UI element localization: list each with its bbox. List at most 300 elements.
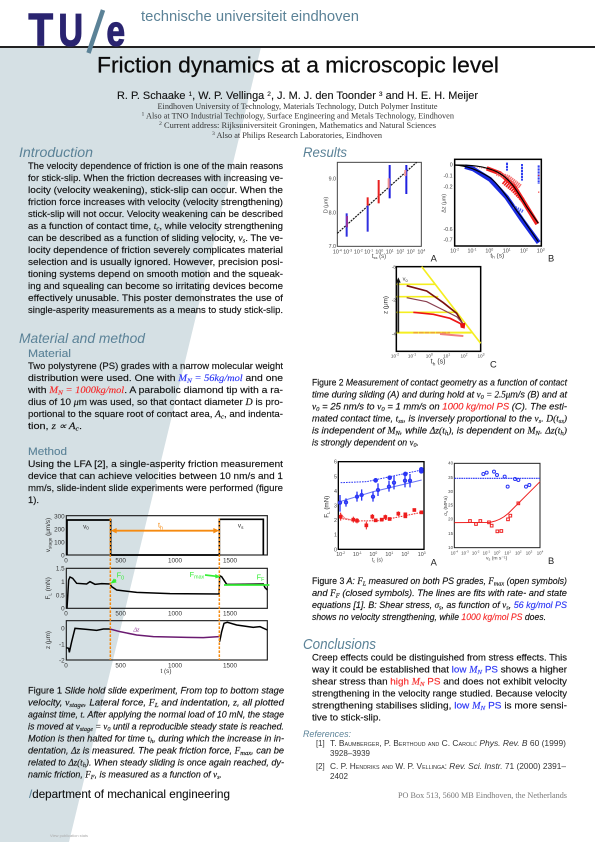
- text: figure 2 caption: N: [534, 430, 541, 437]
- chart: figure 1 time traces: (mN): [45, 577, 52, 593]
- authors: and H. E. H. Meijer: [383, 90, 478, 102]
- chart: figure 3A lateral force vs contact time: L: [326, 511, 331, 514]
- chart: figure 2C indentation curves per velocity: 0: [405, 278, 408, 283]
- chart: figure 2A contact diameter: 10: [354, 250, 360, 256]
- text: introduction body: for stick-slip. When the friction decreases with increasing ve-: [28, 173, 283, 183]
- chart: figure 3A lateral force vs contact time: 1: [391, 551, 393, 555]
- authors: 3: [379, 91, 383, 98]
- text: figure 3 caption: and F: [312, 588, 336, 598]
- text: figure 2 caption: .: [417, 438, 419, 448]
- chart: figure 3A lateral force vs contact time: 10: [418, 552, 424, 558]
- chart: figure 2B indentation vs hold time: [441, 159, 554, 264]
- chart: figure 2A contact diameter: D (μm): [323, 197, 329, 213]
- text: material body: and one: [245, 373, 278, 383]
- chart: figure 2A contact diameter: 0: [381, 249, 383, 253]
- chart: figure 3B shear stress vs sliding velocity: -1: [487, 550, 490, 554]
- chart: figure 1 time traces: 1000: [168, 610, 183, 617]
- chart: figure 2A contact diameter: 3: [413, 249, 415, 253]
- chart: figure 2A contact diameter: 10: [396, 250, 402, 256]
- chart: figure 2B indentation vs hold time: -0.6: [443, 227, 453, 233]
- chart: figure 3A lateral force vs contact time: 0: [375, 551, 377, 555]
- heading: Introduction: Introduction: [19, 144, 93, 160]
- chart: figure 2A contact diameter: 9.0: [329, 177, 336, 183]
- text: introduction body: single-asperity measurements as a means to study stick-slip.: [28, 305, 283, 315]
- chart: figure 1 time traces: 0: [61, 552, 65, 559]
- chart: figure 2A contact diameter: ss: [374, 255, 378, 260]
- text: material body: Two polystyrene (PS) grades with a narrow molecular weight: [28, 361, 283, 371]
- text: figure 1 caption: Motion is then halted for time t: [28, 734, 150, 744]
- chart: figure 3B shear stress vs sliding velocity: 0: [499, 550, 501, 554]
- chart: figure 3A lateral force vs contact time: 4: [334, 489, 337, 495]
- chart: figure 2A contact diameter: 7.0: [329, 244, 336, 250]
- text: figure 2 caption: v: [312, 402, 317, 412]
- chart: figure 2A contact diameter: 2: [402, 249, 404, 253]
- authors: 2: [267, 91, 271, 98]
- text: figure 2 caption: is independent of M: [312, 426, 395, 436]
- chart: figure 3B shear stress vs sliding velocity: σ: [443, 513, 449, 516]
- chart: figure 2A contact diameter: 10: [375, 250, 381, 256]
- chart: figure 1 time traces: 500: [115, 610, 126, 617]
- chart: figure 2C indentation curves per velocity: z (μm): [382, 296, 389, 314]
- text: figure 1 caption: . When steady sliding is once again reached, dy-: [89, 758, 287, 768]
- data: fit lines: [455, 165, 538, 223]
- text: figure 2 caption: 0: [381, 406, 385, 413]
- chart: figure 2B indentation vs hold time: 10: [503, 249, 509, 255]
- text: figure 2 caption: , is inversely proportional to the: [403, 414, 535, 424]
- chart: figure 1 time traces: s: [241, 525, 244, 530]
- chart: figure 2C indentation curves per velocity: 3: [483, 352, 485, 356]
- text: conclusions body: PS: [482, 664, 498, 674]
- chart: figure 2A contact diameter: 10: [333, 250, 339, 256]
- chart: figure 2A contact diameter: 1: [392, 249, 394, 253]
- chart: figure 2A contact diameter: -1: [370, 249, 373, 253]
- text: material body: N: [186, 378, 193, 384]
- text: figure 2 caption: [312, 378, 567, 449]
- chart: figure 1 time traces: 1000: [168, 557, 183, 564]
- text: figure 1 caption: velocity, v: [28, 698, 69, 708]
- authors: 1: [189, 91, 193, 98]
- logo: TU/e: e: [106, 8, 125, 56]
- text: material body: with M: [28, 385, 57, 395]
- text: figure 1 caption: s: [217, 774, 220, 781]
- text: figure 3 caption: shows no velocity strengthening, while 1000 kg/mol PS does.: [312, 612, 546, 622]
- text: figure 2 caption: Figure 2 Measurement of contact geometry as a function of contact: [312, 378, 567, 388]
- chart: figure 2C indentation curves per velocity: v: [403, 277, 405, 283]
- chart: figure 3B shear stress vs sliding velocity: (MPa): [443, 496, 449, 511]
- text: figure 1 caption: Figure 1 Slide hold slide experiment, From top to bottom stage: [28, 686, 284, 696]
- text: figure 2 caption: v: [377, 402, 382, 412]
- chart: figure 3A lateral force vs contact time: c: [373, 559, 375, 563]
- chart: figure 2A contact diameter: 10: [407, 250, 413, 256]
- chart: figure 2B indentation vs hold time: 10: [468, 249, 473, 255]
- chart: figure 2B indentation vs hold time: -0.2: [443, 184, 453, 190]
- text: figure 1 caption: .: [220, 770, 222, 780]
- text: figure 2 caption: Δz(t: [429, 426, 445, 436]
- heading: References: References:: [303, 729, 351, 739]
- affiliations: Also at Philips Research Laboratories, Eindhoven: [215, 131, 382, 140]
- chart: figure 1 time traces: Δz: [132, 627, 140, 634]
- text: introduction body: . The ve-: [245, 233, 283, 243]
- chart: figure 1 time traces: 500: [115, 663, 126, 670]
- markers: friction annotations: F: [190, 570, 194, 579]
- text: figure 2 caption: h: [445, 430, 448, 437]
- chart: figure 2B indentation vs hold time: (s): [495, 252, 504, 259]
- text: figure 3 caption: L: [362, 580, 367, 588]
- text: introduction body: , while velocity strengthening: [159, 221, 283, 231]
- chart: figure 3B shear stress vs sliding velocity: 10: [537, 550, 542, 555]
- text: introduction body: as a function of contact time, t: [28, 221, 156, 231]
- text: figure 1 caption: , during which the increase in in-: [153, 734, 284, 744]
- chart: figure 2B indentation vs hold time: h: [492, 255, 495, 260]
- text: material body: portional to the square root of contact area, A: [28, 409, 221, 419]
- chart: figure 3A lateral force vs contact time: 10: [385, 552, 391, 558]
- chart: figure 1 time traces: 0: [61, 606, 65, 613]
- text: conclusions body: strengthening stabilises sliding, low M: [312, 700, 480, 710]
- chart: figure 1 time traces: 500: [115, 557, 126, 564]
- text: reference list: T. Baumberger, P. Berthoud and C. Caroli: Phys. Rev. B 60 (1999): [330, 739, 566, 748]
- chart: figure 3B shear stress vs sliding velocity: 40: [448, 460, 454, 465]
- chart: figure 1 time traces: t (s): [161, 668, 171, 675]
- data: fits: [454, 477, 540, 480]
- chart: figure 1 time traces: 1500: [223, 557, 238, 564]
- trace: lateral force: [67, 576, 267, 608]
- text: reference list: 2402: [330, 772, 348, 781]
- text: figure 2 caption: , is dependent on M: [451, 426, 535, 436]
- chart: figure 3A lateral force vs contact time: 10: [336, 552, 342, 558]
- chart: figure 2C indentation curves per velocity: h: [433, 361, 436, 367]
- text: figure 3 caption: v: [502, 600, 507, 610]
- chart: figure 2C indentation curves per velocity: 10: [460, 353, 466, 358]
- chart: figure 3A lateral force vs contact time: (s): [375, 557, 383, 563]
- text: figure 1 caption: stage: [80, 726, 93, 733]
- chart: figure 1 time traces: 200: [54, 526, 65, 533]
- chart: figure 2A contact diameter: [323, 162, 438, 264]
- data: fit lines: [340, 470, 422, 521]
- chart: figure 3B shear stress vs sliding velocity: -2: [477, 550, 480, 554]
- text: introduction body: [28, 161, 283, 315]
- chart: figure 2A contact diameter: 4: [423, 249, 425, 253]
- chart: figure 1 time traces: L: [47, 593, 52, 596]
- text: material body: N: [57, 390, 64, 396]
- chart: figure 2A contact diameter: 10: [364, 250, 370, 256]
- markers: friction annotations: [110, 570, 269, 585]
- text: conclusions body: N: [476, 669, 483, 676]
- chart: figure 2B indentation vs hold time: -1: [473, 248, 477, 252]
- chart: figure 2A contact diameter: 8.0: [329, 210, 336, 216]
- text: figure 1 caption: , Lateral force,: [84, 698, 149, 708]
- text: figure 1 caption: v: [213, 770, 218, 780]
- chart: figure 2C indentation curves per velocity: 10: [391, 353, 396, 358]
- text: material body: distribution were used. One with M: [28, 373, 186, 383]
- chart: figure 3B shear stress vs sliding velocity: 20: [448, 517, 454, 522]
- chart: figure 3B shear stress vs sliding velocity: 10: [483, 550, 487, 555]
- text: figure 2 caption: 0: [316, 406, 320, 413]
- chart: figure 3B shear stress vs sliding velocity: 10: [472, 550, 477, 555]
- chart: figure 2A contact diameter: 10: [417, 250, 423, 256]
- text: figure 1 caption: stage: [69, 702, 84, 709]
- chart: figure 1 time traces: 0: [86, 526, 89, 531]
- chart: figure 3B shear stress vs sliding velocity: (m s⁻¹): [490, 556, 508, 562]
- chart: figure 3B shear stress vs sliding velocity: 1: [509, 550, 511, 554]
- marker: hold time dashed lines and arrow: h: [160, 525, 163, 531]
- text: figure 2 caption: ): [563, 414, 567, 424]
- text: figure 2 caption: Δz(t: [544, 426, 561, 436]
- text: conclusions body: PS: [425, 676, 440, 686]
- text: material body: , and indenta-: [224, 409, 283, 419]
- chart: figure 3B shear stress vs sliding velocity: 35: [448, 475, 454, 480]
- text: figure 2 caption: 0: [413, 442, 417, 449]
- text: figure 1 caption: max: [240, 750, 251, 757]
- text: conclusions body: shows a higher: [501, 664, 562, 674]
- text: figure 3 caption: , as function of: [441, 600, 502, 610]
- text: figure 2 caption: ss: [398, 418, 404, 425]
- chart: figure 2A contact diameter: -4: [339, 249, 342, 253]
- chart: figure 1 time traces: 0: [61, 626, 65, 633]
- chart: figure 3A lateral force vs contact time: (mN): [324, 496, 331, 511]
- text: conclusions body: and does not exhibit velocity: [443, 676, 558, 686]
- text: figure 2 caption: = 2.5μ: [484, 390, 511, 400]
- chart: figure 3B shear stress vs sliding velocity: v: [486, 556, 488, 562]
- university name: technische universiteit eindhoven: [141, 9, 359, 25]
- heading: Conclusions: Conclusions: [303, 636, 376, 653]
- chart: figure 2C indentation curves per velocity: 10: [443, 353, 448, 358]
- chart: figure 2C indentation curves per velocity: -2: [392, 298, 396, 303]
- markers: friction annotations: F: [117, 571, 121, 580]
- text: material body: tion, z ∝ A: [28, 421, 72, 431]
- authors: , W. P. Vellinga: [192, 90, 267, 102]
- footer: view publication stats: View publication stats: [50, 833, 88, 838]
- text: figure 1 caption: h: [83, 762, 86, 769]
- text: method body: device that can achieve velocities between 10 nm/s and 1: [28, 471, 283, 481]
- chart: figure 2C indentation curves per velocity: (s): [435, 358, 445, 365]
- text: material body: dius of 10 μm was used, so that contact diameter D is pro-: [28, 397, 283, 407]
- chart: figure 3A lateral force vs contact time: [324, 460, 438, 568]
- marker: hold time dashed lines and arrow: [110, 518, 219, 660]
- text: figure 1 caption: z, all plotted: [233, 698, 281, 708]
- text: introduction body: locity dependence of friction severely complicates material: [28, 245, 283, 255]
- text: introduction body: can be described as a function of sliding velocity, v: [28, 233, 242, 243]
- title: Friction dynamics at a microscopic level: [97, 52, 499, 78]
- heading: Results: Results: [303, 144, 347, 160]
- text: figure 2 caption: , while: [400, 426, 430, 436]
- chart: figure 2B indentation vs hold time: 1: [509, 248, 511, 252]
- chart: figure 3B shear stress vs sliding velocity: 10: [494, 550, 499, 555]
- text: figure 1 caption: , is measured as a function of: [95, 770, 213, 780]
- text: introduction body: selection and is usually ignored. However, precision posi-: [28, 257, 283, 267]
- chart: figure 2A contact diameter: (s): [378, 254, 386, 260]
- chart: figure 2B indentation vs hold time: -0.7: [443, 238, 453, 244]
- text: figure 2 caption: 1000 kg/mol PS (C). The esti-: [442, 402, 565, 412]
- affiliations: Eindhoven University of Technology, Materials Technology, Dutch Polymer Institute: [158, 102, 438, 111]
- text: figure 2 caption: ): [563, 426, 567, 436]
- text: figure 2 caption: ss: [559, 418, 564, 425]
- chart: figure 2B indentation vs hold time: -0.1: [443, 173, 453, 179]
- markers: friction annotations: max: [194, 575, 205, 581]
- text: method body: 1).: [28, 495, 39, 505]
- chart: figure 3A lateral force vs contact time: 0: [334, 547, 337, 553]
- affiliations: Also at TNO Industrial Technology, Surface Engineering and Metals Technology, Eindhoven: [144, 112, 454, 120]
- text: figure 1 caption: is moved at v: [28, 722, 80, 732]
- text: figure 2 caption: v: [535, 414, 540, 424]
- chart: figure 2B indentation vs hold time: B: [548, 254, 554, 264]
- chart: figure 3B shear stress vs sliding velocity: 10: [515, 550, 520, 555]
- text: material body: c: [76, 426, 79, 432]
- text: figure 1 caption: F: [148, 698, 155, 708]
- chart: figure 3A lateral force vs contact time: F: [324, 514, 331, 518]
- subheading: Material: Material: [28, 348, 71, 360]
- chart: figure 3B shear stress vs sliding velocity: 3: [531, 550, 533, 554]
- chart: figure 3A lateral force vs contact time: 1: [334, 533, 337, 539]
- affiliations: 2: [159, 121, 162, 127]
- chart: figure 2C indentation curves per velocity: -8: [392, 264, 396, 269]
- chart: figure 1 time traces: 100: [54, 540, 65, 547]
- chart: figure 2B indentation vs hold time: 10: [450, 249, 456, 255]
- text: conclusions body: way it could be established that low M: [312, 664, 477, 674]
- text: conclusions body: is more sensi-: [504, 700, 561, 710]
- affiliations: 3: [212, 131, 215, 137]
- chart: figure 1 time traces: 1.5: [56, 566, 65, 573]
- text: introduction body: The velocity dependence of friction is one of the main reasons: [28, 161, 283, 171]
- data: yellow fit lines: [397, 267, 481, 343]
- affiliations: 1: [142, 112, 145, 118]
- data: blue scatter: [465, 167, 539, 243]
- chart: figure 3A lateral force vs contact time: 3: [334, 504, 337, 510]
- text: conclusions body: PS: [485, 700, 502, 710]
- chart: figure 1 time traces: 0: [64, 663, 68, 670]
- affiliations: [142, 102, 454, 140]
- text: figure 2 caption: s: [539, 418, 542, 425]
- chart: figure 3A lateral force vs contact time: A: [431, 558, 438, 568]
- chart: figure 1 time traces: v: [83, 523, 86, 530]
- text: figure 3 caption: equations [1]. B: Shear stress, σ: [312, 600, 439, 610]
- text: material body: .: [79, 421, 82, 431]
- chart: figure 1 time traces: 1000: [168, 663, 183, 670]
- chart: figure 3B shear stress vs sliding velocity: B: [548, 556, 554, 566]
- text: figure 3 caption: ,: [509, 600, 514, 610]
- text: figure 2 caption: D(t: [545, 414, 559, 424]
- text: method body: Using the LFA [2], a single-asperity friction measurement: [28, 459, 283, 469]
- chart: figure 1 time traces: 1500: [223, 663, 238, 670]
- text: figure 3 caption: s: [506, 604, 509, 612]
- text: figure 1 caption: , can be: [251, 746, 284, 756]
- heading: Material and method: Material and method: [19, 330, 146, 346]
- chart: figure 3B shear stress vs sliding velocity: -4: [455, 550, 458, 554]
- text: figure 2 caption: ): [447, 426, 451, 436]
- data: red open squares: [469, 502, 520, 533]
- chart: figure 2B indentation vs hold time: 0: [491, 248, 493, 252]
- text: figure 2 caption: time during sliding (A) and during hold at v: [312, 390, 481, 400]
- chart: figure 2C indentation curves per velocity: C: [490, 359, 497, 369]
- chart: figure 2A contact diameter: 10: [386, 250, 392, 256]
- text: figure 1 caption: until a reproducible steady state is reached.: [110, 722, 284, 732]
- chart: figure 3B shear stress vs sliding velocity: s: [445, 511, 449, 513]
- chart: figure 2C indentation curves per velocity: t: [431, 358, 433, 365]
- chart: figure 2B indentation vs hold time: 3: [543, 248, 545, 252]
- chart: figure 2C indentation curves per velocity: [382, 264, 497, 369]
- text: figure 3 caption: (closed symbols). The lines are fits with rate- and state: [340, 588, 567, 598]
- chart: figure 2A contact diameter: -2: [360, 249, 363, 253]
- chart: figure 2A contact diameter: t: [372, 254, 374, 260]
- chart: figure 3B shear stress vs sliding velocity: 15: [448, 531, 454, 536]
- chart: figure 2C indentation curves per velocity: -2: [396, 352, 399, 356]
- text: figure 2 caption: .: [541, 414, 546, 424]
- text: figure 2 caption: 0: [481, 394, 485, 401]
- chart: figure 3A lateral force vs contact time: -2: [342, 551, 345, 555]
- text: figure 1 caption: 0: [107, 726, 111, 733]
- text: figure 1 caption: related to Δz(t: [28, 758, 83, 768]
- chart: figure 1 time traces: (μm/s): [45, 518, 52, 538]
- text: figure 3 caption: 56 kg/mol PS: [514, 600, 568, 610]
- chart: figure 3A lateral force vs contact time: 2: [407, 551, 409, 555]
- chart: figure 3B shear stress vs sliding velocity: 2: [520, 550, 522, 554]
- trace: stage velocity: [67, 519, 263, 555]
- logo: TU/e: T: [28, 4, 53, 56]
- chart: figure 3A lateral force vs contact time: 10: [353, 552, 359, 558]
- text: figure 1 caption: L: [154, 702, 159, 709]
- chart: figure 2B indentation vs hold time: 10: [485, 249, 491, 255]
- text: conclusions body: N: [419, 681, 425, 688]
- chart: figure 3B shear stress vs sliding velocity: 10: [526, 550, 531, 555]
- text: figure 2 caption: h: [560, 430, 564, 437]
- chart: figure 3B shear stress vs sliding velocity: 10: [504, 550, 509, 555]
- markers: friction annotations: F: [261, 577, 265, 583]
- chart: figure 2C indentation curves per velocity: 10: [426, 353, 431, 358]
- logo: TU/e: [28, 4, 125, 56]
- text: figure 1 caption: [28, 686, 285, 781]
- text: figure 1 caption: against time, t. After applying the normal load of 10 mN, the stage: [28, 710, 284, 720]
- subheading: Method: Method: [28, 446, 67, 458]
- text: introduction body: stick-slip will not occur. Velocity weakening can be described: [28, 209, 283, 219]
- address: PO Box 513, 5600 MB Eindhoven, the Netherlands: [398, 790, 567, 800]
- data: red scatter: [455, 163, 539, 243]
- text: figure 2 caption: = 25 nm/s to: [320, 402, 377, 412]
- trace: indentation: [66, 622, 267, 652]
- chart: figure 3A lateral force vs contact time: -1: [359, 551, 362, 555]
- text: figure 3 caption: Figure 3 A: F: [312, 576, 363, 586]
- chart: figure 2B indentation vs hold time: 10: [520, 249, 526, 255]
- chart: figure 2A contact diameter: -3: [349, 249, 352, 253]
- chart: figure 1 time traces: 0: [64, 557, 68, 564]
- text: conclusions body: shear stress than high M: [312, 676, 419, 686]
- text: figure 2 caption: N: [394, 430, 401, 437]
- text: figure 2 caption: mated contact time, t: [312, 414, 398, 424]
- chart: figure 1 time traces: v: [45, 549, 52, 552]
- chart: figure 2C indentation curves per velocity: 2: [466, 352, 468, 356]
- text: introduction body: s: [243, 238, 246, 244]
- text: introduction body: tioning systems depend on smooth motion and the squeak-: [28, 269, 283, 279]
- text: figure 1 caption: dentation, Δz is measured. The peak friction force, F: [28, 746, 240, 756]
- chart: figure 2B indentation vs hold time: 0: [450, 163, 453, 169]
- chart: figure 1 time traces: v: [238, 523, 241, 530]
- text: method body: mm/s, slide-indent slide experiments were performed (figure: [28, 483, 283, 493]
- chart: figure 3A lateral force vs contact time: 10: [369, 552, 375, 558]
- chart: figure 2C indentation curves per velocity: 0: [431, 352, 433, 356]
- chart: figure 2C indentation curves per velocity: -1: [413, 352, 416, 356]
- text: figure 1 caption: F: [90, 774, 96, 781]
- arrow: increasing velocity: [396, 277, 401, 333]
- text: figure 3 caption: F: [335, 592, 341, 600]
- chart: figure 1 time traces: -1: [59, 642, 65, 649]
- chart: figure 3B shear stress vs sliding velocity: s: [488, 558, 490, 562]
- chart: figure 1 time traces: 1: [61, 579, 65, 586]
- text: material body: . A parabolic diamond tip with a ra-: [124, 385, 265, 395]
- text: figure 3 caption: max: [494, 580, 504, 588]
- text: material body: [27, 361, 283, 432]
- text: material body: = 56kg/mol: [192, 373, 243, 383]
- chart: figure 3B shear stress vs sliding velocity: 25: [448, 503, 454, 508]
- chart: figure 2C indentation curves per velocity: -4: [392, 331, 396, 336]
- text: conclusions body: Creep effects could be distinguished from stress effects. This: [312, 652, 567, 662]
